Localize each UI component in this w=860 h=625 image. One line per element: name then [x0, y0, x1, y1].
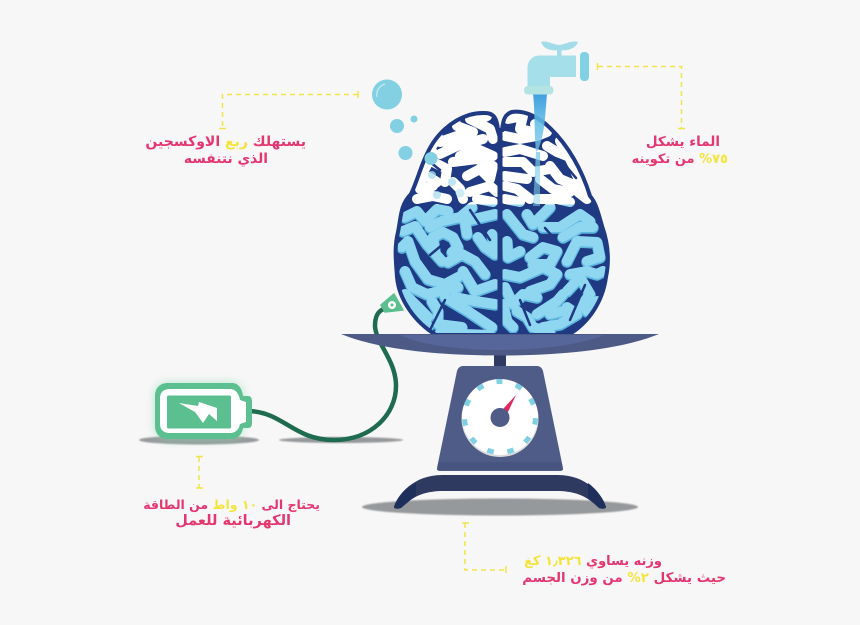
shadow: battery	[139, 436, 259, 444]
text: oxygen: الذي نتنفسه	[184, 151, 268, 167]
gyri: lower right	[503, 207, 603, 332]
leader: oxygen	[219, 91, 358, 128]
scale plate	[341, 334, 659, 356]
shadow: cable	[279, 437, 403, 443]
gyri shading	[402, 208, 603, 336]
text: oxygen: يستهلك ربع الاوكسجين	[145, 134, 306, 150]
leader: water	[598, 63, 685, 128]
faucet body	[528, 56, 576, 87]
battery glow	[155, 383, 243, 439]
cable	[250, 309, 396, 440]
illustration	[138, 42, 685, 573]
faucet	[524, 41, 589, 94]
scale base	[394, 475, 606, 509]
scale stem	[494, 352, 506, 368]
bubbles	[372, 80, 464, 199]
battery bolt	[179, 402, 217, 423]
gyri	[402, 115, 603, 335]
text: water	[632, 134, 728, 167]
faucet nozzle	[524, 86, 554, 94]
battery charge	[167, 396, 231, 428]
text: oxygen	[145, 134, 306, 167]
brain	[396, 112, 608, 338]
brain silhouette	[396, 112, 608, 335]
scale needle	[503, 395, 516, 412]
battery casing	[155, 383, 252, 439]
shadow: scale	[362, 498, 638, 516]
water stream	[533, 94, 547, 206]
scale	[341, 334, 659, 509]
scale hub	[490, 408, 510, 427]
battery inner ring	[160, 389, 246, 433]
plug	[381, 294, 403, 312]
extra folds	[428, 164, 586, 330]
gyri: lower left	[402, 207, 495, 335]
faucet handle	[541, 41, 578, 50]
text: energy	[143, 497, 320, 529]
scale dial	[462, 380, 538, 457]
brain outline	[396, 112, 608, 335]
text: weight: حيث يشكل ٢% من وزن الجسم	[522, 571, 726, 586]
text: water: ٧٥% من تكوينه	[632, 152, 728, 167]
text: weight: وزنه يساوي ١٫٣٢٦ كغ	[524, 554, 662, 569]
text: energy: يحتاج الى ١٠ واط من الطاقة	[143, 497, 320, 512]
gyri: upper left	[417, 115, 497, 202]
text: energy: الكهربائية للعمل	[175, 513, 291, 529]
leader: weight	[462, 523, 506, 573]
text: water: الماء يشكل	[646, 134, 720, 150]
faucet cap	[580, 52, 589, 81]
scale body	[437, 366, 563, 471]
battery	[155, 383, 252, 439]
gyri: upper right	[505, 116, 587, 202]
midline	[498, 132, 502, 330]
text: weight	[522, 554, 726, 586]
leader: energy	[196, 456, 203, 488]
